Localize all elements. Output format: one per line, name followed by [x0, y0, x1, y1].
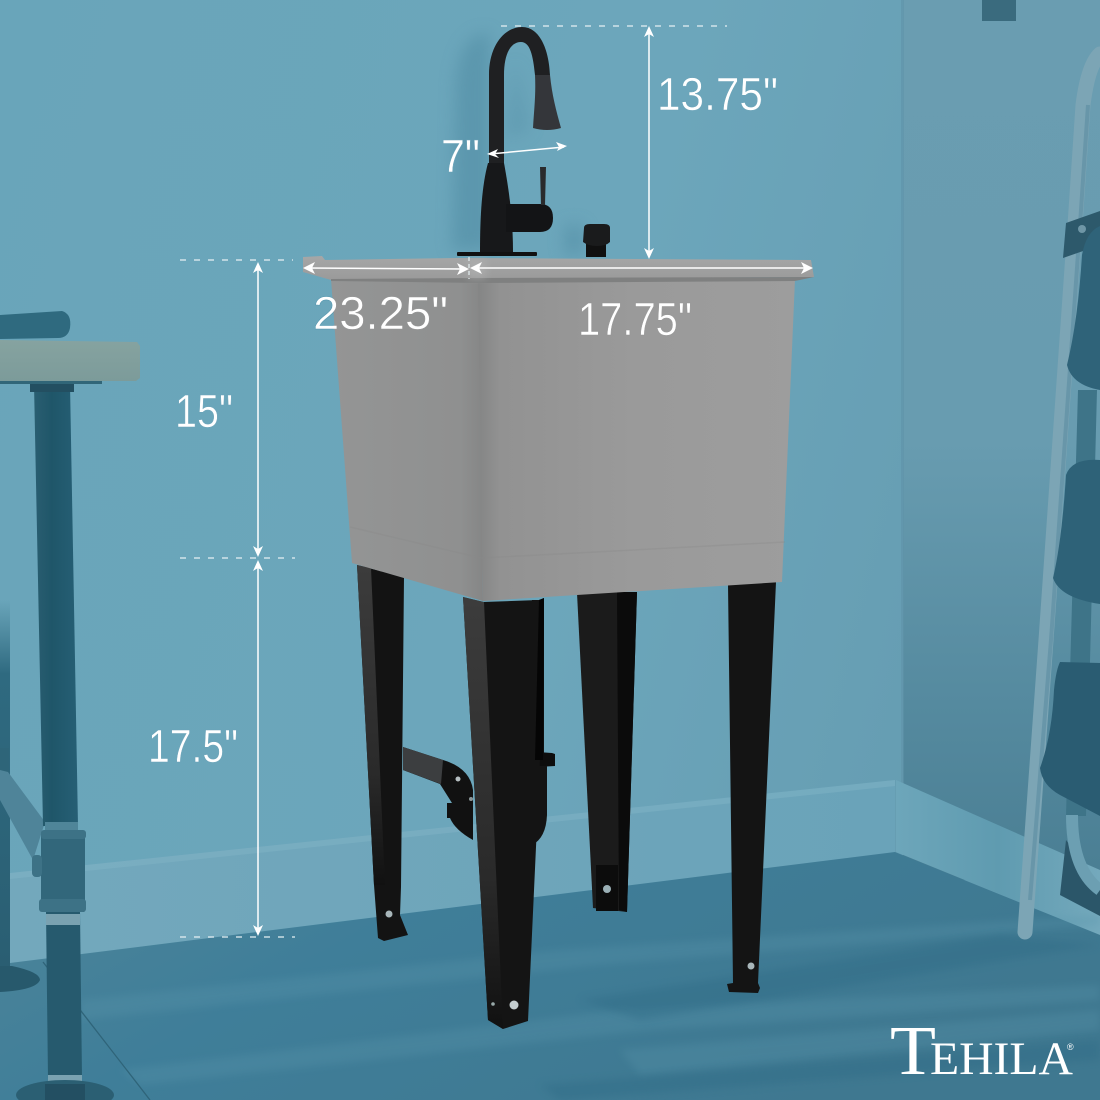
- shadows on wall: [452, 34, 583, 255]
- label 23.25: 23.25": [313, 287, 448, 339]
- stool main pipe: [34, 384, 78, 826]
- soap dispenser: [583, 224, 610, 257]
- label 15: 15": [175, 385, 233, 437]
- stool on the left: [0, 311, 140, 1100]
- rear tube: [1066, 390, 1097, 816]
- leg: right: [727, 582, 776, 993]
- label 13.75: 13.75": [657, 68, 778, 120]
- bracket: [1063, 211, 1100, 258]
- top wall bracket: [982, 0, 1016, 21]
- faucet: [457, 27, 561, 256]
- sink basin: [303, 256, 814, 601]
- step two: [1053, 460, 1100, 604]
- handle: [506, 204, 553, 232]
- leg: front: [463, 597, 544, 1029]
- dimension: height of faucet: [501, 26, 778, 259]
- leg: left: [357, 565, 408, 941]
- front rail: [1025, 54, 1100, 932]
- label 7: 7": [441, 130, 480, 182]
- pipe threads: [45, 822, 78, 835]
- dimension: basin height: [175, 260, 293, 557]
- logo: Tehila: [890, 1013, 1074, 1090]
- spray head: [533, 75, 561, 130]
- label 17.75: 17.75": [578, 293, 692, 345]
- dimension: sink depth: [303, 257, 469, 339]
- step three: [1040, 662, 1100, 816]
- base plate: [457, 252, 537, 256]
- lower pipe: [46, 912, 82, 1078]
- drain pipe: [403, 600, 555, 845]
- floor flange: [16, 1080, 114, 1100]
- pipe coupling: [32, 830, 86, 912]
- sink rim: [303, 256, 814, 280]
- leg: back: [577, 592, 637, 912]
- wood top: [0, 340, 140, 381]
- step one: [1067, 226, 1100, 390]
- dimension: faucet reach: [441, 130, 567, 182]
- lever: [540, 167, 546, 205]
- dimension: sink width: [470, 262, 813, 345]
- step ladder: [1025, 54, 1100, 932]
- spout: [489, 27, 550, 166]
- logo: Tehila: EHILA: [930, 1033, 1073, 1085]
- logo: Tehila: T: [890, 1013, 936, 1090]
- label 17.5: 17.5": [148, 720, 238, 772]
- faucet body: [480, 163, 513, 252]
- registered mark: ®: [1067, 1042, 1074, 1052]
- back pipe: [0, 600, 40, 992]
- diagonal pipe: [0, 770, 45, 860]
- dimension: leg height: [148, 558, 295, 937]
- lower foot: [1060, 815, 1100, 916]
- towel: [0, 311, 70, 339]
